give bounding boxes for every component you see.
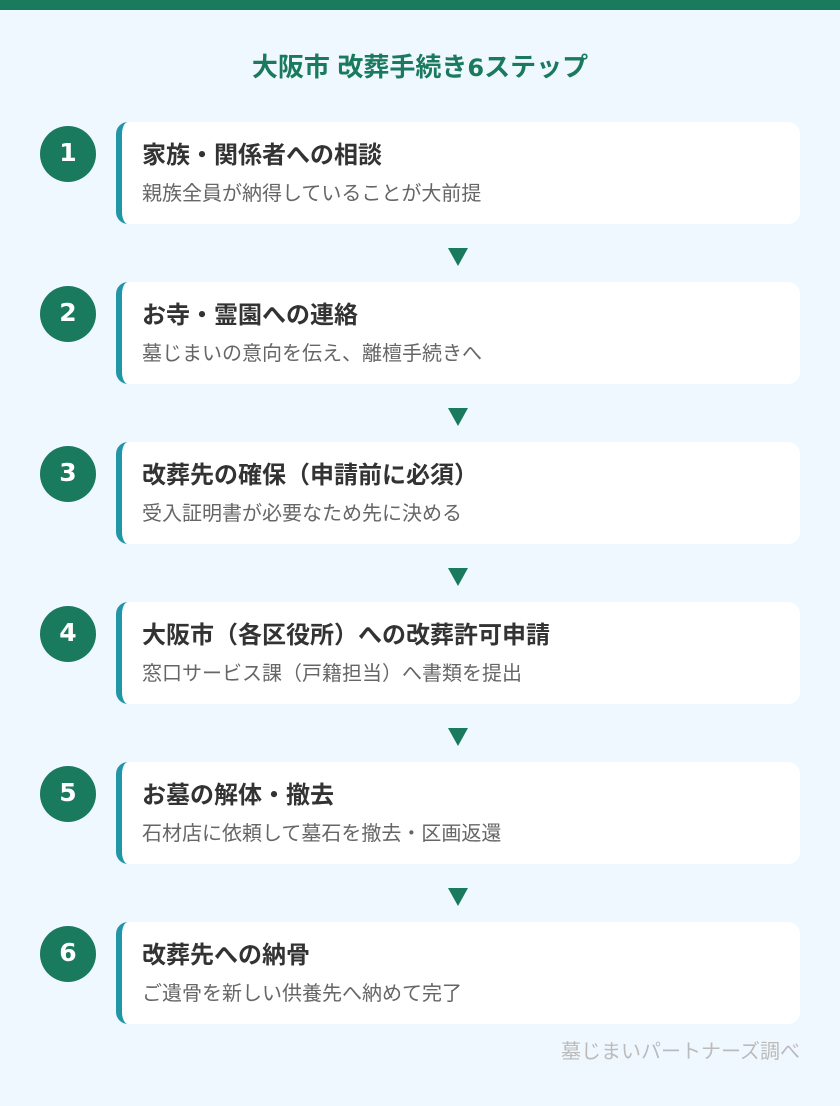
step 3 xyxy=(40,442,800,544)
step 2 description: 墓じまいの意向を伝え、離檀手続きへ xyxy=(142,341,482,365)
step 1 xyxy=(40,122,800,224)
source credit: 墓じまいパートナーズ調べ xyxy=(561,1039,800,1063)
arrow 2 to 3 xyxy=(448,408,468,426)
step 4 number: 4 xyxy=(59,618,77,647)
step 3 card xyxy=(116,442,800,544)
step 4 number xyxy=(40,606,96,662)
step 1 number xyxy=(40,126,96,182)
step 5 xyxy=(40,762,800,864)
step 4 xyxy=(40,602,800,704)
step 2 heading: お寺・霊園への連絡 xyxy=(142,301,358,329)
step 3 number: 3 xyxy=(59,458,77,487)
step 5 number xyxy=(40,766,96,822)
step 6 xyxy=(40,922,800,1024)
step 3 heading: 改葬先の確保（申請前に必須） xyxy=(142,461,478,489)
step 1 description: 親族全員が納得していることが大前提 xyxy=(142,181,481,205)
step 3 number xyxy=(40,446,96,502)
step 4 card xyxy=(116,602,800,704)
arrow 5 to 6 xyxy=(448,888,468,906)
step 4 heading: 大阪市（各区役所）への改葬許可申請 xyxy=(142,621,550,649)
arrow 4 to 5 xyxy=(448,728,468,746)
step 1 card xyxy=(116,122,800,224)
step 2 number: 2 xyxy=(59,298,77,327)
arrow 3 to 4 xyxy=(448,568,468,586)
step 6 number xyxy=(40,926,96,982)
step 4 description: 窓口サービス課（戸籍担当）へ書類を提出 xyxy=(142,661,522,685)
step 2 number xyxy=(40,286,96,342)
step 5 description: 石材店に依頼して墓石を撤去・区画返還 xyxy=(142,821,501,845)
top bar xyxy=(0,0,840,10)
title: 大阪市 改葬手続き6ステップ xyxy=(252,53,588,83)
arrow 1 to 2 xyxy=(448,248,468,266)
step 6 number: 6 xyxy=(59,938,77,967)
step 1 heading: 家族・関係者への相談 xyxy=(142,141,382,169)
step 3 description: 受入証明書が必要なため先に決める xyxy=(142,501,462,525)
step 1 number: 1 xyxy=(59,138,77,167)
step 5 heading: お墓の解体・撤去 xyxy=(142,781,334,809)
step 5 number: 5 xyxy=(59,778,77,807)
step 5 card xyxy=(116,762,800,864)
step 6 heading: 改葬先への納骨 xyxy=(142,941,310,969)
step 2 card xyxy=(116,282,800,384)
step 6 card xyxy=(116,922,800,1024)
step 6 description: ご遺骨を新しい供養先へ納めて完了 xyxy=(142,981,462,1005)
step 2 xyxy=(40,282,800,384)
